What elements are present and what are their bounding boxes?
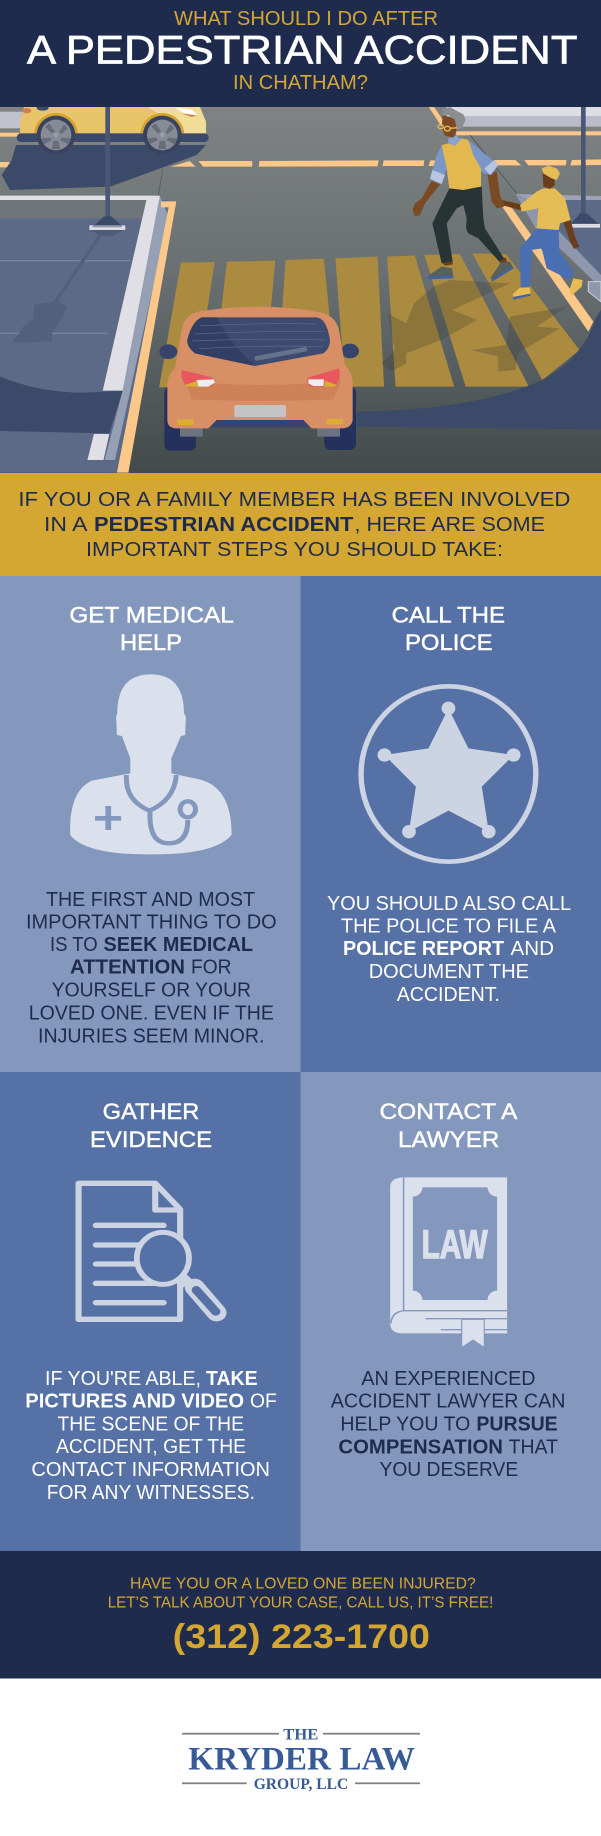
heading: contact a lawyer <box>380 1099 517 1152</box>
body text: AND <box>510 938 554 960</box>
logo: the kryder law group: THE <box>283 1726 318 1743</box>
gold intro band: , HERE ARE SOME <box>354 514 545 536</box>
child <box>492 166 583 300</box>
body text: SEEK MEDICAL <box>104 934 253 956</box>
body text: PURSUE <box>476 1414 558 1436</box>
heading: contact a lawyer: CONTACT A <box>380 1099 517 1124</box>
navy shadow bottom right <box>356 310 601 429</box>
logo: the kryder law group <box>182 1726 420 1793</box>
body text: YOU DESERVE <box>380 1459 518 1481</box>
body text: ACCIDENT LAWYER CAN <box>331 1391 565 1413</box>
icon: doctor with stethoscope <box>70 674 232 854</box>
main title: A PEDESTRIAN ACCIDENT <box>27 28 578 72</box>
body text: AN EXPERIENCED <box>361 1368 536 1390</box>
body text: OF <box>250 1391 277 1413</box>
body text: TAKE <box>206 1368 258 1390</box>
body text: IF YOU'RE ABLE, <box>45 1368 201 1390</box>
body text: FOR ANY WITNESSES. <box>47 1482 255 1504</box>
panel: contact a lawyer <box>300 1072 601 1551</box>
icon: law book <box>390 1177 507 1348</box>
call to action text: HAVE YOU OR A LOVED ONE BEEN INJURED? <box>130 1575 476 1592</box>
body text: DOCUMENT THE <box>369 961 529 983</box>
pedestrians: man and child holding hands <box>413 107 583 300</box>
gold intro band: IMPORTANT STEPS YOU SHOULD TAKE: <box>86 539 503 561</box>
panel: call the police <box>300 576 601 1072</box>
body text: LOVED ONE. EVEN IF THE <box>29 1003 274 1025</box>
logo: the kryder law group: KRYDER LAW <box>188 1741 415 1777</box>
body text: YOURSELF OR YOUR <box>52 980 251 1002</box>
heading: gather evidence: GATHER <box>103 1099 199 1124</box>
icon: law book: LAW <box>422 1223 488 1267</box>
heading: gather evidence: EVIDENCE <box>90 1127 212 1152</box>
body text: THAT <box>509 1436 558 1458</box>
body text: FOR <box>191 957 232 979</box>
man <box>413 107 514 282</box>
call to action text: LET’S TALK ABOUT YOUR CASE, CALL US, IT’S FREE! <box>108 1594 493 1611</box>
body text: YOU SHOULD ALSO CALL <box>327 893 571 915</box>
heading: gather evidence <box>90 1099 212 1152</box>
right sidewalk <box>516 195 601 283</box>
body text: ATTENTION <box>70 957 185 979</box>
body text: IMPORTANT THING TO DO <box>26 912 277 934</box>
body text: PICTURES AND VIDEO <box>25 1391 244 1413</box>
body text <box>331 1368 565 1481</box>
orange car <box>159 307 359 451</box>
header line 3: IN CHATHAM? <box>233 72 368 94</box>
panel: get medical help <box>0 576 300 1072</box>
phone number: (312) 223-1700 <box>173 1618 430 1656</box>
heading: get medical help: HELP <box>120 630 182 655</box>
body text <box>327 893 571 1006</box>
panel: gather evidence <box>0 1072 300 1551</box>
heading: call the police: CALL THE <box>392 603 505 628</box>
body text <box>26 889 277 1048</box>
illustration: street scene with pedestrians and cars <box>0 105 601 473</box>
body text: THE SCENE OF THE <box>58 1414 244 1436</box>
heading: contact a lawyer: LAWYER <box>398 1127 499 1152</box>
crosswalk stripes <box>159 253 580 387</box>
header banner <box>0 0 601 107</box>
heading: call the police: POLICE <box>405 630 492 655</box>
call to action text <box>108 1575 493 1611</box>
street ground and crosswalk <box>0 107 601 473</box>
gold intro band: PEDESTRIAN ACCIDENT <box>94 514 353 536</box>
heading: call the police <box>392 603 505 655</box>
header line 1: WHAT SHOULD I DO AFTER <box>174 8 438 30</box>
left block <box>0 200 169 473</box>
body text: INJURIES SEEM MINOR. <box>38 1026 264 1048</box>
icon: sheriff star badge <box>361 686 536 862</box>
body text: CONTACT INFORMATION <box>31 1459 270 1481</box>
right street pole <box>470 105 600 228</box>
body text: THE POLICE TO FILE A <box>341 915 557 937</box>
body text <box>25 1368 277 1504</box>
logo: the kryder law group: GROUP, LLC <box>254 1776 348 1793</box>
body text: IS TO <box>50 934 98 956</box>
yellow car with shadow and street pole <box>2 105 209 236</box>
heading: get medical help: GET MEDICAL <box>69 603 234 628</box>
gold intro band: IN A <box>44 514 88 536</box>
footer call to action <box>0 1551 601 1678</box>
body text: ACCIDENT. <box>397 984 500 1006</box>
body text: COMPENSATION <box>338 1436 503 1458</box>
figure shadows <box>381 280 567 372</box>
icon: document with magnifying glass <box>79 1183 217 1319</box>
heading: get medical help <box>69 603 234 655</box>
gold intro band <box>0 473 601 576</box>
body text: ACCIDENT, GET THE <box>56 1436 246 1458</box>
body text: THE FIRST AND MOST <box>46 889 255 911</box>
body text: HELP YOU TO <box>340 1414 470 1436</box>
gold intro band: IF YOU OR A FAMILY MEMBER HAS BEEN INVOLVED <box>18 489 570 511</box>
body text: POLICE REPORT <box>343 938 504 960</box>
